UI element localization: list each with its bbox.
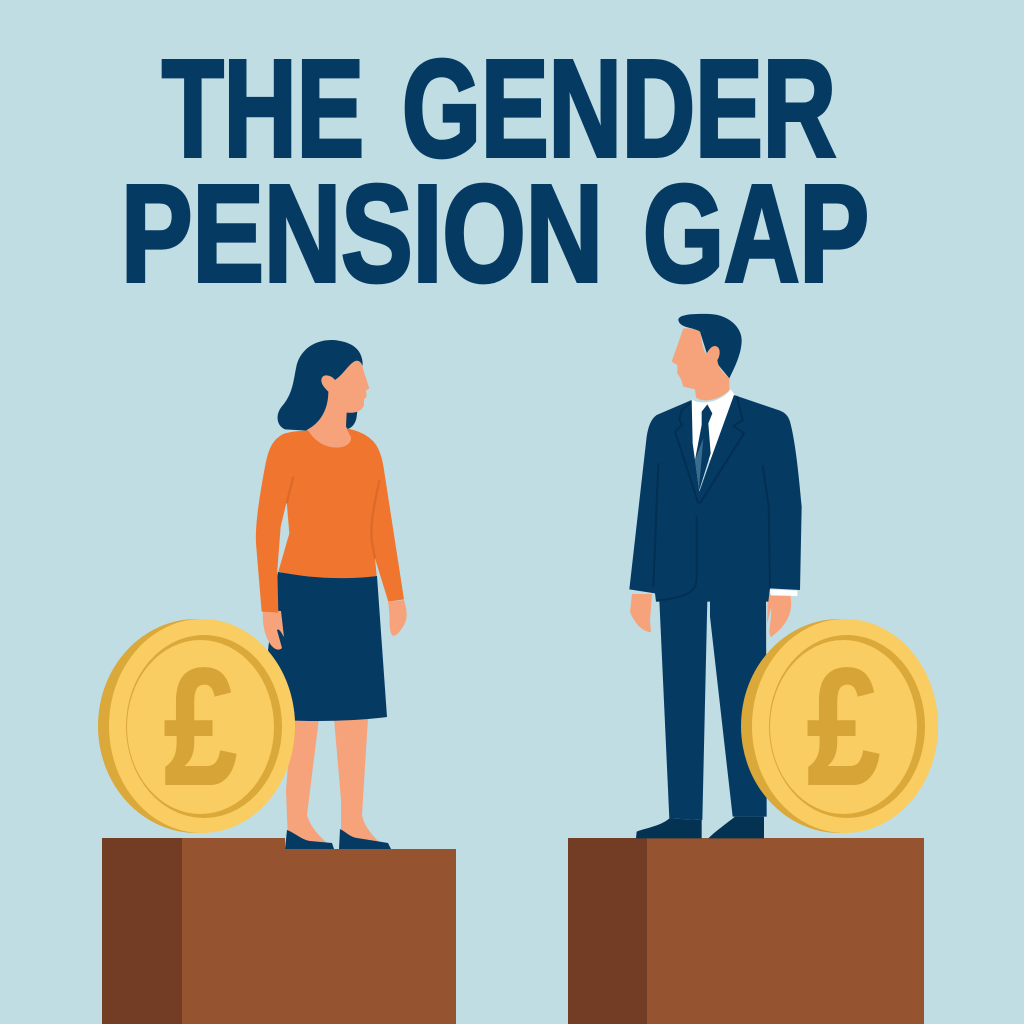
man figure: [629, 314, 802, 838]
coin edge: [741, 619, 938, 833]
title: THE: [162, 32, 364, 186]
woman upper body: [256, 340, 404, 613]
man jacket lapels and seams: [653, 396, 770, 601]
coin inner ring: [769, 635, 925, 818]
left pedestal: [102, 838, 456, 1024]
right pedestal: [568, 838, 924, 1024]
right pound coin: [741, 619, 938, 833]
pound symbol: £: [807, 635, 880, 820]
title: GENDER: [402, 32, 836, 186]
woman legs: [286, 718, 380, 843]
man hands: [630, 594, 791, 637]
title: [121, 32, 869, 311]
woman figure: [256, 340, 407, 849]
woman face and neck: [307, 361, 369, 452]
woman hands: [263, 600, 407, 650]
man trousers: [636, 600, 767, 838]
man tie highlight: [695, 438, 703, 488]
man upper body: [629, 314, 802, 602]
coin inner ring: [126, 635, 282, 818]
man face and neck: [672, 328, 729, 400]
title: GAP: [643, 157, 869, 311]
woman skirt: [268, 572, 387, 721]
left pound coin: [98, 619, 295, 833]
woman sweater folds: [287, 477, 379, 558]
man shirt cuff: [770, 589, 797, 596]
man jacket: [629, 395, 802, 602]
woman hair: [278, 340, 363, 431]
coin face: [752, 619, 938, 833]
man hair: [678, 314, 742, 378]
coin centre: [770, 640, 917, 814]
coin centre: [127, 640, 274, 814]
man tie: [695, 404, 712, 490]
man shirt collar: [692, 389, 735, 460]
man shoes: [636, 817, 764, 838]
title: PENSION: [121, 157, 603, 311]
woman shoes: [285, 829, 391, 849]
pound symbol: £: [164, 635, 237, 820]
woman sweater: [256, 429, 404, 613]
coin edge: [98, 619, 295, 833]
coin face: [109, 619, 295, 833]
